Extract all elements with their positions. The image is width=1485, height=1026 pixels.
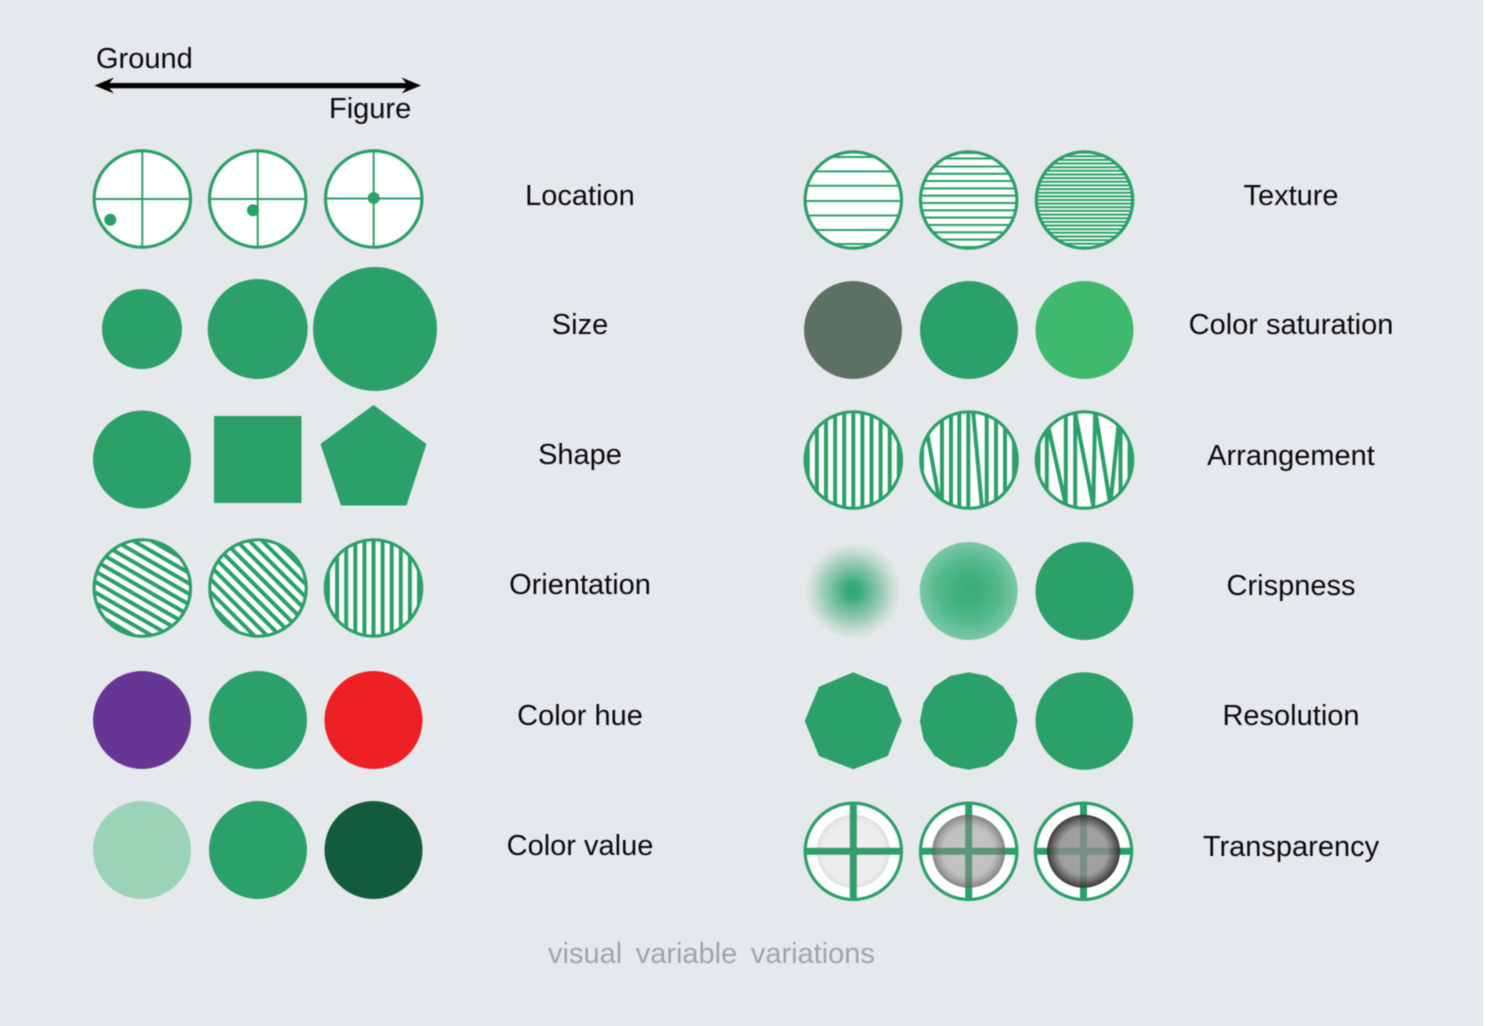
icon: smooth circle <box>1036 672 1133 770</box>
icon: square <box>214 416 302 503</box>
label: Color hue: Color hue <box>517 700 643 732</box>
icon: small circle <box>102 289 182 369</box>
label: Crispness: Crispness <box>1227 570 1355 602</box>
icon: mid saturation circle <box>920 281 1018 379</box>
icon: dark green circle <box>324 801 422 899</box>
icon: coarse texture <box>802 150 904 250</box>
icon: medium circle <box>208 279 308 379</box>
row: Orientation <box>92 538 424 638</box>
infographic canvas <box>92 46 1392 964</box>
icon: stripes at 45 degrees <box>207 538 308 638</box>
row: Arrangement <box>802 410 1135 510</box>
label: Ground: Ground <box>96 43 193 75</box>
label: Arrangement: Arrangement <box>1207 440 1375 472</box>
icon: slightly blurred circle <box>920 542 1018 640</box>
icon: location centre <box>325 151 422 247</box>
icon: medium texture <box>918 150 1020 250</box>
row: Texture <box>793 152 1144 248</box>
row: Resolution <box>805 672 1133 770</box>
label: Figure: Figure <box>329 93 411 125</box>
icon: large circle <box>313 267 437 391</box>
icon: red circle <box>324 671 422 769</box>
icon: crisp circle <box>1036 542 1134 640</box>
icon: location low left <box>94 151 191 247</box>
axis: ground to figure <box>94 43 421 125</box>
label: Size: Size <box>552 309 608 341</box>
icon: fine texture <box>1034 150 1135 250</box>
icon: high opacity overlay <box>1034 802 1132 900</box>
icon: pentagon <box>320 405 426 506</box>
icon: irregular arrangement <box>1034 410 1135 510</box>
icon: saturated circle <box>1036 281 1134 379</box>
icon: medium opacity overlay <box>920 802 1018 900</box>
icon: green circle <box>209 671 307 769</box>
row: Color saturation <box>804 281 1134 379</box>
row: Color value <box>93 801 422 899</box>
label: Texture: Texture <box>1243 180 1339 212</box>
row: Color hue <box>93 671 422 769</box>
label: Location: Location <box>525 180 635 212</box>
icon: mid green circle <box>209 801 307 899</box>
label: Resolution: Resolution <box>1222 700 1360 732</box>
label: Shape: Shape <box>538 439 622 471</box>
icon: regular arrangement <box>802 410 904 510</box>
label: Color saturation: Color saturation <box>1189 309 1393 341</box>
row: Shape <box>93 405 426 508</box>
row: Transparency <box>804 802 1132 900</box>
label: Color value: Color value <box>507 830 653 862</box>
icon: octagon <box>805 672 902 769</box>
row: Location <box>94 151 422 247</box>
icon: vertical stripes <box>322 538 424 638</box>
icon: purple circle <box>93 671 191 769</box>
icon: sixteen-sided polygon <box>920 672 1018 770</box>
icon: desaturated circle <box>804 281 902 379</box>
icon: low opacity overlay <box>804 802 902 900</box>
caption: visual variable variations <box>548 938 875 970</box>
icon: circle <box>93 410 191 508</box>
row: Size <box>102 267 437 391</box>
icon: stripes at 30 degrees <box>92 538 193 638</box>
icon: light green circle <box>93 801 191 899</box>
icon: slightly irregular arrangement <box>918 410 1020 510</box>
icon: very blurred circle <box>804 542 902 640</box>
row: Crispness <box>804 542 1134 640</box>
label: Transparency: Transparency <box>1203 831 1380 863</box>
label: Orientation: Orientation <box>509 569 651 601</box>
icon: location near centre <box>209 151 306 247</box>
arrow: double headed <box>94 78 421 94</box>
